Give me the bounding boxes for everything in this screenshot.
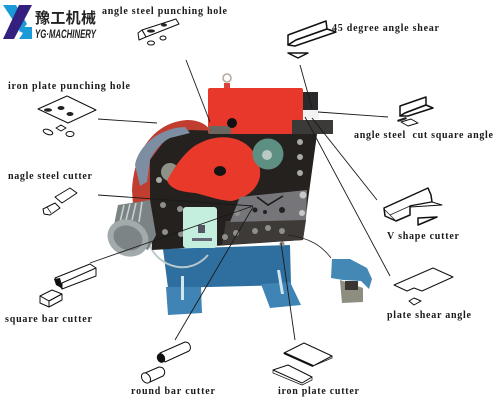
label: plate shear angle: plate shear angle bbox=[387, 310, 472, 321]
label: iron plate punching hole: iron plate punching hole bbox=[8, 81, 131, 92]
label: V shape cutter: V shape cutter bbox=[387, 231, 460, 242]
icon: angle steel punching hole bbox=[138, 19, 179, 45]
bolts right bbox=[156, 139, 303, 183]
blue base bbox=[150, 245, 301, 315]
foot pedal bbox=[331, 259, 372, 303]
pedal cable bbox=[288, 235, 331, 258]
black plate bbox=[150, 130, 317, 250]
lifting ring bbox=[223, 74, 231, 88]
red top box bbox=[208, 88, 303, 134]
icon: nagle steel cutter bbox=[43, 188, 77, 215]
label: angle steel punching hole: angle steel punching hole bbox=[102, 6, 228, 17]
label: 45 degree angle shear: 45 degree angle shear bbox=[332, 23, 440, 34]
icon: V shape cutter bbox=[384, 188, 442, 225]
grey die block bbox=[230, 190, 307, 222]
icon: square bar cutter bbox=[40, 264, 96, 307]
lower plate strip bbox=[222, 220, 306, 245]
motor bbox=[101, 200, 156, 263]
red cam bbox=[167, 137, 260, 201]
machine bbox=[101, 74, 333, 315]
teal flange bbox=[252, 138, 284, 170]
icon: iron plate cutter bbox=[273, 343, 332, 385]
label: angle steel cut square angle: angle steel cut square angle bbox=[354, 130, 494, 141]
red guard bbox=[132, 120, 212, 218]
icon: 45 degree angle shear bbox=[288, 21, 336, 58]
label: nagle steel cutter: nagle steel cutter bbox=[8, 171, 93, 182]
icon: angle steel cut square angle bbox=[397, 97, 433, 126]
icon: iron plate punching hole bbox=[38, 96, 96, 137]
logo bbox=[3, 5, 97, 41]
top clamps bbox=[209, 126, 231, 134]
logo: 豫工机械 bbox=[35, 7, 96, 28]
leader lines bbox=[90, 60, 390, 340]
label: square bar cutter: square bar cutter bbox=[5, 314, 93, 325]
icon: plate shear angle bbox=[394, 268, 453, 305]
icon: round bar cutter bbox=[140, 342, 190, 385]
logo: YG·MACHINERY bbox=[35, 29, 97, 41]
label: round bar cutter: round bar cutter bbox=[131, 386, 216, 397]
grey wheel bbox=[135, 127, 190, 186]
lower bolts bbox=[160, 202, 285, 246]
label: iron plate cutter: iron plate cutter bbox=[278, 386, 360, 397]
green control box bbox=[183, 207, 217, 248]
